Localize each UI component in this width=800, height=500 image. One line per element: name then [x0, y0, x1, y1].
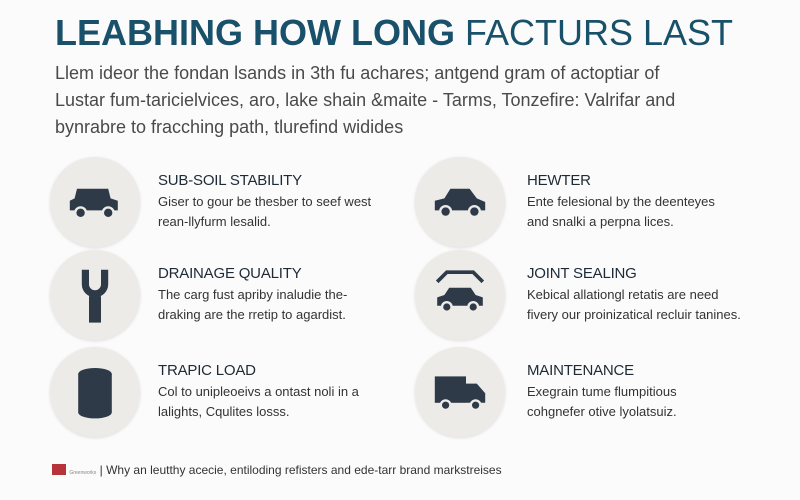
- panel: traffic load: Col to unipleoeivs a ontast noli in a: [158, 384, 359, 399]
- footer: Greenworks | Why an leutthy acecie, entiloding refisters and ede-tarr brand markstreises: [69, 463, 502, 477]
- intro text: Llem ideor the fondan lsands in 3th fu achares; antgend gram of actoptiar of: [55, 63, 659, 83]
- panel: hewter: HEWTER: [527, 172, 591, 189]
- panel: drainage quality: The carg fust apriby inaludie the-: [158, 287, 347, 302]
- panel: maintenance: cohgnefer otive lyolatsuiz.: [527, 404, 677, 419]
- panel: sub-soil stability: Giser to gour be thesber to seef west: [158, 194, 371, 209]
- panel: sub-soil stability: rean-llyfurm lesalid.: [158, 214, 271, 229]
- intro text: [55, 63, 675, 137]
- icon: car under arch: [415, 250, 505, 340]
- panel: traffic load: TRAPIC LOAD: [158, 362, 256, 379]
- panel: drainage quality: [158, 265, 347, 322]
- icon: wrench: [50, 250, 140, 340]
- panel: traffic load: lalights, Cqulites losss.: [158, 404, 290, 419]
- panel: traffic load: [158, 362, 359, 419]
- intro text: Lustar fum-taricielvices, aro, lake shain &maite - Tarms, Tonzefire: Valrifar and: [55, 90, 675, 110]
- panel: hewter: and snalki a perpna lices.: [527, 214, 674, 229]
- panel: hewter: Ente felesional by the deenteyes: [527, 194, 715, 209]
- panel: joint sealing: JOINT SEALING: [527, 265, 637, 282]
- panel: sub-soil stability: SUB-SOIL STABILITY: [158, 172, 302, 189]
- icon: car: [50, 157, 140, 247]
- panel: sub-soil stability: [158, 172, 371, 229]
- icon: car right: [415, 157, 505, 247]
- panel: joint sealing: [527, 265, 741, 322]
- title: LEABHING HOW LONG FACTURS LAST: [55, 12, 733, 53]
- icon: truck: [415, 347, 505, 437]
- panel: joint sealing: fivery our proinizatical recluir tanines.: [527, 307, 741, 322]
- icon: barrel: [50, 347, 140, 437]
- panel: maintenance: [527, 362, 677, 419]
- panel: hewter: [527, 172, 715, 229]
- panel: joint sealing: Kebical allationgl retatis are need: [527, 287, 719, 302]
- intro text: bynrabre to fracching path, tlurefind widides: [55, 117, 403, 137]
- panel: maintenance: MAINTENANCE: [527, 362, 634, 379]
- panel: maintenance: Exegrain tume flumpitious: [527, 384, 677, 399]
- panel: drainage quality: DRAINAGE QUALITY: [158, 265, 302, 282]
- panel: drainage quality: draking are the rretip to agardist.: [158, 307, 346, 322]
